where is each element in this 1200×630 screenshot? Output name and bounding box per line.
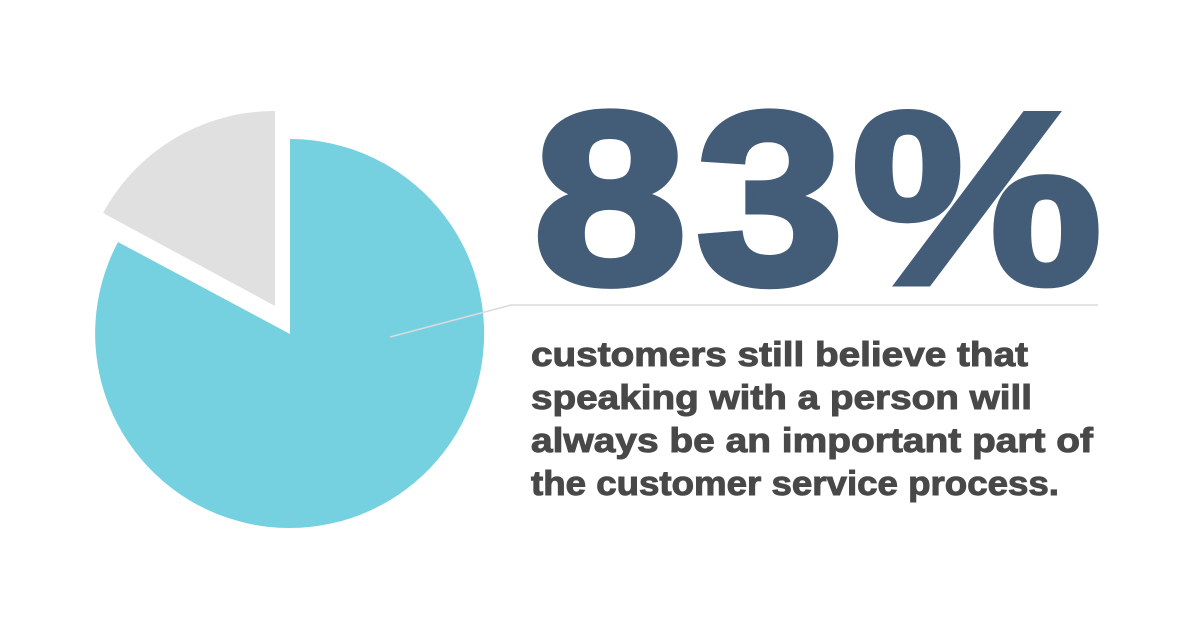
description text: the customer service process. <box>531 465 1059 503</box>
pie slice: remaining 17 percent <box>103 111 275 306</box>
description text: customers still believe that <box>531 336 1028 374</box>
description text <box>531 336 1094 503</box>
leader line from pie to statistic <box>390 305 1098 337</box>
description text: always be an important part of <box>531 422 1094 460</box>
pie chart <box>95 111 484 528</box>
big statistic: 83% <box>533 61 1102 335</box>
big statistic: 83%: 8 <box>533 61 687 335</box>
big statistic: 83%: % <box>852 61 1102 335</box>
description text: speaking with a person will <box>531 379 1032 417</box>
pie slice: 83 percent <box>95 139 484 528</box>
big statistic: 83%: 3 <box>696 61 844 335</box>
